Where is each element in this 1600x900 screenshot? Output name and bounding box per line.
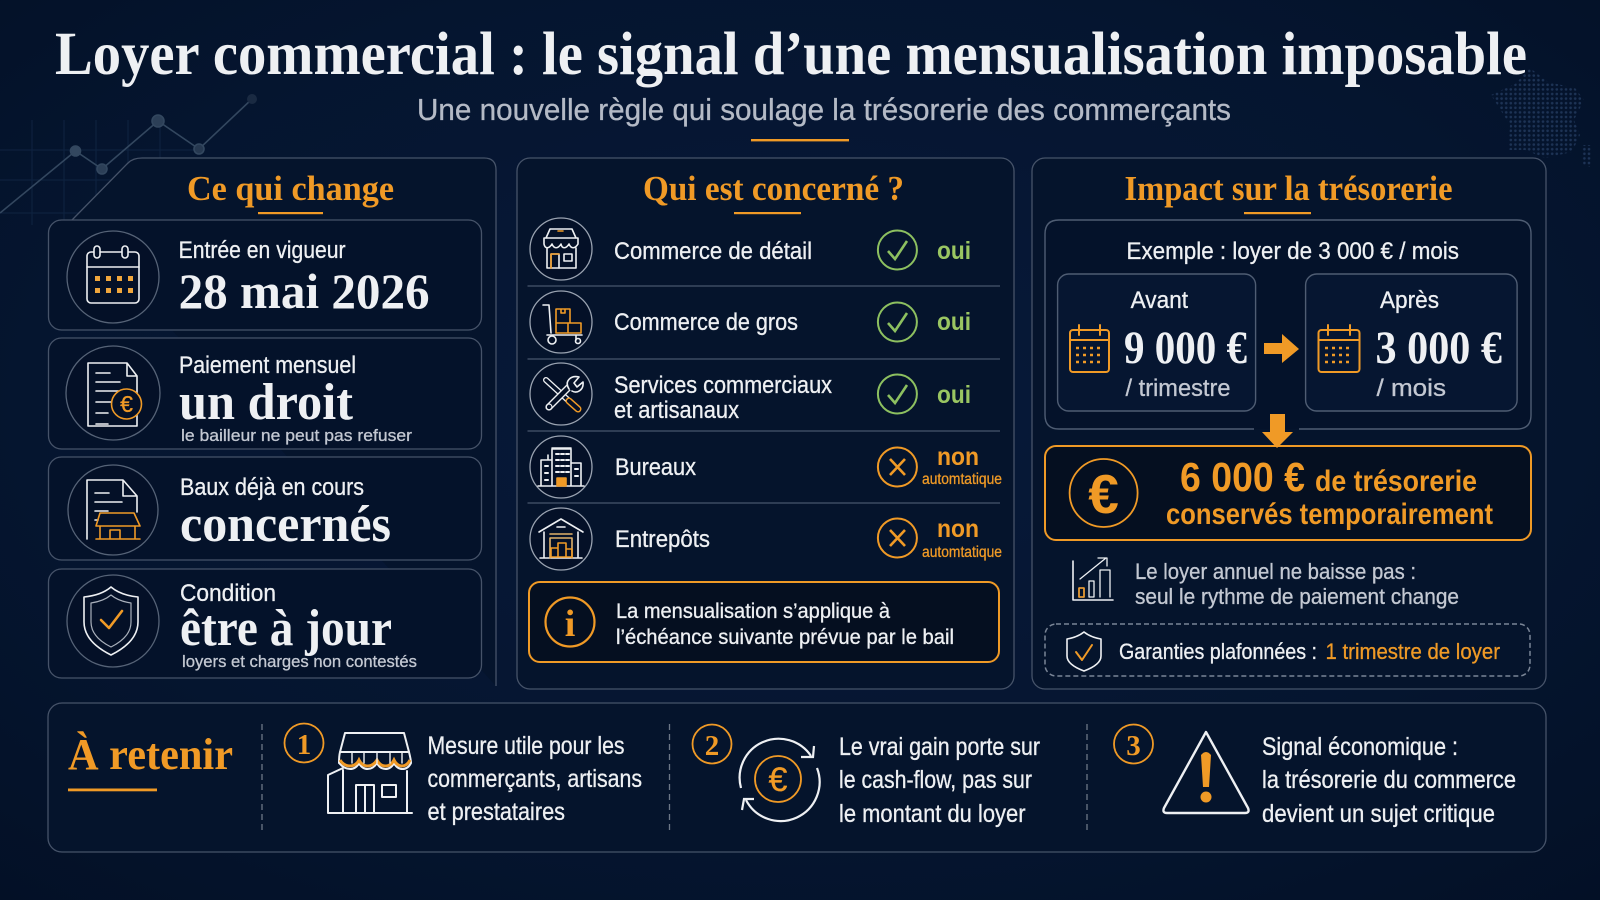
row: bureaux: Bureaux xyxy=(615,454,696,481)
icon: document euro: € xyxy=(120,391,133,417)
row: commerce de gros: oui xyxy=(937,308,971,336)
item 3: Signal économique : xyxy=(1262,733,1458,761)
heading: impact: Impact sur la trésorerie xyxy=(1124,169,1452,208)
row: entrepôts: non xyxy=(937,515,979,543)
icon: euro cycle: € xyxy=(769,761,788,799)
note: loyer annuel xyxy=(1073,558,1459,609)
row: bureaux: automtatique xyxy=(922,471,1002,488)
icon: store xyxy=(544,229,578,268)
card: avant xyxy=(1058,274,1256,411)
card: entrée en vigueur: Entrée en vigueur xyxy=(179,237,346,264)
card: paiement mensuel: Paiement mensuel xyxy=(179,352,356,379)
result box: 6 000 €: 6 000 € xyxy=(1180,454,1305,500)
card: après: / mois xyxy=(1376,375,1446,402)
arrow: avant to après xyxy=(1264,334,1299,363)
result box: 6 000 € xyxy=(1045,446,1531,540)
item 2: Le vrai gain porte sur xyxy=(839,733,1040,761)
heading: qui est concerné: Qui est concerné ? xyxy=(643,169,904,208)
row: bureaux: non xyxy=(937,443,979,471)
icon: cross xyxy=(878,518,917,558)
row: entrepôts: Entrepôts xyxy=(615,526,710,553)
card: avant: / trimestre xyxy=(1126,375,1230,402)
item 2: 2 xyxy=(705,730,719,762)
icon: check xyxy=(878,230,917,270)
icon: lease document with shop xyxy=(87,480,140,539)
icon: check xyxy=(878,302,917,342)
card: condition xyxy=(48,569,482,678)
item 1 xyxy=(284,724,642,826)
icon: shield xyxy=(84,587,138,655)
card: paiement mensuel xyxy=(48,338,482,449)
example box xyxy=(1045,220,1531,429)
icon: warning xyxy=(1163,732,1249,813)
row: commerce de détail: Commerce de détail xyxy=(614,238,812,265)
icon: warehouse xyxy=(539,519,583,558)
background: France dot map xyxy=(1491,68,1592,167)
row: entrepôts: automtatique xyxy=(922,544,1002,561)
icon: calendar orange xyxy=(1318,325,1360,372)
item 2: le montant du loyer xyxy=(839,800,1026,828)
result box: 6 000 €: € xyxy=(1088,463,1119,525)
guarantee box xyxy=(1045,624,1530,676)
icon: building xyxy=(538,448,584,486)
card: après xyxy=(1306,274,1517,411)
card: entrée en vigueur: 28 mai 2026 xyxy=(179,263,430,319)
guarantee box: Garanties plafonnées : xyxy=(1119,639,1317,664)
panel: qui est concerné xyxy=(517,158,1014,689)
note: loyer annuel: Le loyer annuel ne baisse pas : xyxy=(1135,559,1416,584)
heading: ce qui change: Ce qui change xyxy=(187,169,394,208)
icon: cart xyxy=(543,305,582,344)
card: paiement mensuel: le bailleur ne peut pas refuser xyxy=(181,426,412,445)
item 3: 3 xyxy=(1126,730,1141,762)
guarantee box: 1 trimestre de loyer xyxy=(1326,639,1500,664)
card: condition: Condition xyxy=(180,580,276,607)
item 1: et prestataires xyxy=(428,798,565,826)
arrow: down to result xyxy=(1262,414,1293,448)
card: après: Après xyxy=(1380,287,1439,314)
panel: impact sur la trésorerie xyxy=(1032,158,1546,689)
icon: check xyxy=(878,374,917,414)
panel: ce qui change xyxy=(48,158,496,686)
title: Loyer commercial : le signal d’une mensualisation imposable xyxy=(55,21,1527,88)
item 3: devient un sujet critique xyxy=(1262,800,1495,828)
row: commerce de gros xyxy=(530,291,971,353)
callout: mensualisation: i xyxy=(565,603,575,645)
background: line chart xyxy=(0,94,257,225)
callout: mensualisation xyxy=(529,582,999,662)
callout: mensualisation: La mensualisation s’applique à xyxy=(616,599,890,623)
card: baux déjà en cours: Baux déjà en cours xyxy=(180,474,364,501)
row: services commerciaux xyxy=(530,363,971,425)
icon: calendar orange xyxy=(1070,325,1109,372)
card: entrée en vigueur xyxy=(48,220,482,330)
item 3: la trésorerie du commerce xyxy=(1262,766,1516,794)
card: après: 3 000 € xyxy=(1376,322,1502,374)
note: loyer annuel: seul le rythme de paiement change xyxy=(1135,584,1459,609)
card: baux déjà en cours: concernés xyxy=(180,496,391,553)
row: commerce de gros: Commerce de gros xyxy=(614,309,798,336)
example box: Exemple : loyer de 3 000 € / mois xyxy=(1126,238,1459,265)
card: condition: loyers et charges non contestés xyxy=(182,652,417,671)
item 3 xyxy=(1114,724,1516,828)
result box: 6 000 €: de trésorerie xyxy=(1315,465,1477,498)
card: baux déjà en cours xyxy=(48,457,482,560)
icon: euro cycle xyxy=(740,739,820,821)
panel: à retenir xyxy=(48,703,1546,852)
item 1: 1 xyxy=(297,729,311,761)
card: avant: 9 000 € xyxy=(1124,322,1247,374)
item 2 xyxy=(692,724,1040,828)
row: commerce de détail: oui xyxy=(937,237,971,265)
row: services commerciaux: Services commerciaux xyxy=(614,372,832,399)
item 2: le cash-flow, pas sur xyxy=(839,766,1032,794)
icon: shield check xyxy=(1067,632,1101,671)
icon: document euro xyxy=(88,363,142,426)
icon: cross xyxy=(878,448,917,486)
card: condition: être à jour xyxy=(180,600,392,657)
card: avant: Avant xyxy=(1131,287,1188,314)
row: entrepôts xyxy=(530,508,1002,570)
row: bureaux xyxy=(530,436,1002,498)
row: services commerciaux: et artisanaux xyxy=(614,397,739,424)
icon: calendar xyxy=(87,246,139,303)
icon: growth chart xyxy=(1073,558,1113,600)
row: services commerciaux: oui xyxy=(937,381,971,409)
row: commerce de détail xyxy=(530,218,971,280)
subtitle: Une nouvelle règle qui soulage la trésorerie des commerçants xyxy=(417,92,1231,127)
callout: mensualisation: l’échéance suivante prévue par le bail xyxy=(616,625,954,649)
card: paiement mensuel: un droit xyxy=(179,374,354,431)
result box: 6 000 €: conservés temporairement xyxy=(1166,498,1493,531)
item 1: Mesure utile pour les xyxy=(428,732,624,760)
icon: store xyxy=(328,733,412,813)
icon: tools xyxy=(546,377,583,410)
heading: à retenir: À retenir xyxy=(68,730,233,779)
title accent underline xyxy=(751,139,849,141)
item 1: commerçants, artisans xyxy=(428,765,642,793)
